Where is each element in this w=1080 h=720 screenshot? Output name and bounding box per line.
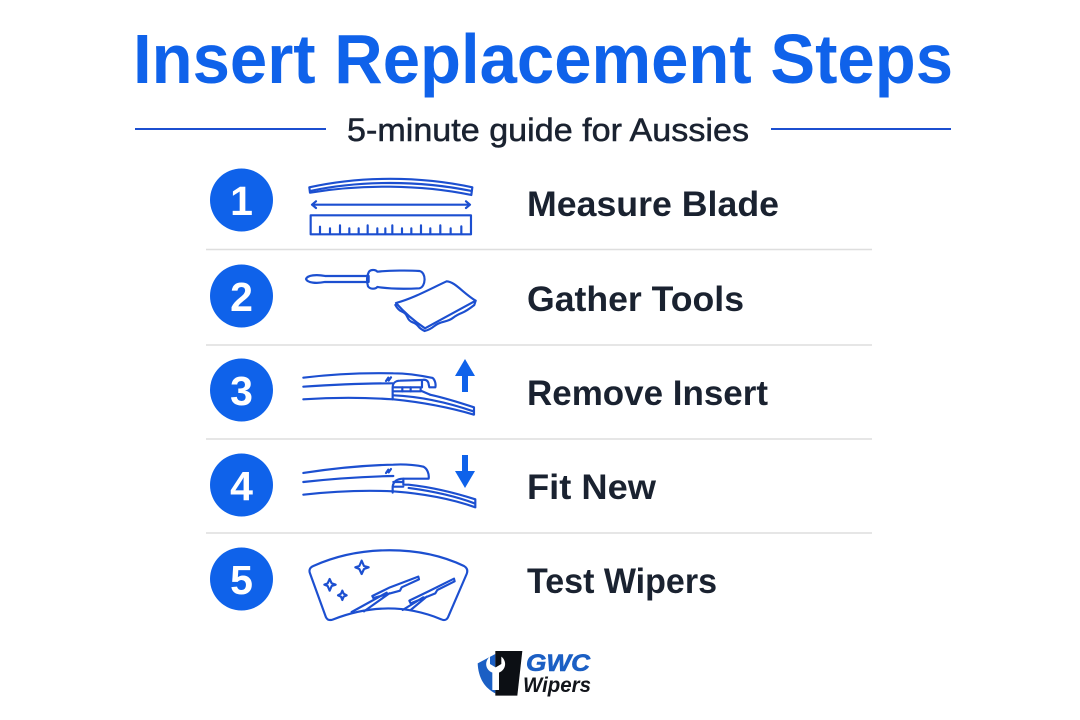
number badge 1: 1 [230, 178, 253, 224]
icon: remove insert [303, 373, 474, 415]
number badge 5 [210, 548, 273, 610]
number badge 1 [210, 168, 273, 232]
number badge 4 [210, 454, 273, 516]
number badge 3: 3 [230, 368, 253, 414]
icon: down arrow [455, 455, 475, 488]
subtitle: 5-minute guide for Aussies [347, 112, 749, 148]
icon: shield and wrench [478, 651, 522, 696]
step 1 [210, 168, 779, 234]
label: Fit New [527, 468, 657, 507]
label: Remove Insert [527, 374, 768, 413]
logo: GWC Wipers: Wipers [523, 674, 591, 697]
icon: windscreen and wipers [309, 550, 467, 620]
step 2 [210, 264, 744, 331]
icon: screwdriver and cloth [306, 270, 476, 331]
number badge 2: 2 [230, 274, 253, 320]
number badge 4: 4 [230, 463, 253, 509]
icon: up arrow [455, 359, 475, 392]
label: Measure Blade [527, 185, 779, 224]
step 5 [210, 548, 717, 620]
icon: blade and ruler [309, 179, 472, 234]
brand name: GWC [526, 650, 591, 677]
number badge 3 [210, 358, 273, 422]
icon: fit new [303, 464, 475, 507]
logo: GWC Wipers [478, 650, 591, 697]
label: Gather Tools [527, 280, 744, 319]
title: Insert Replacement Steps [133, 20, 953, 98]
step 3 [210, 358, 768, 422]
label: Test Wipers [527, 562, 717, 601]
step 4 [210, 454, 657, 516]
number badge 5: 5 [230, 557, 253, 603]
number badge 2 [210, 264, 273, 328]
